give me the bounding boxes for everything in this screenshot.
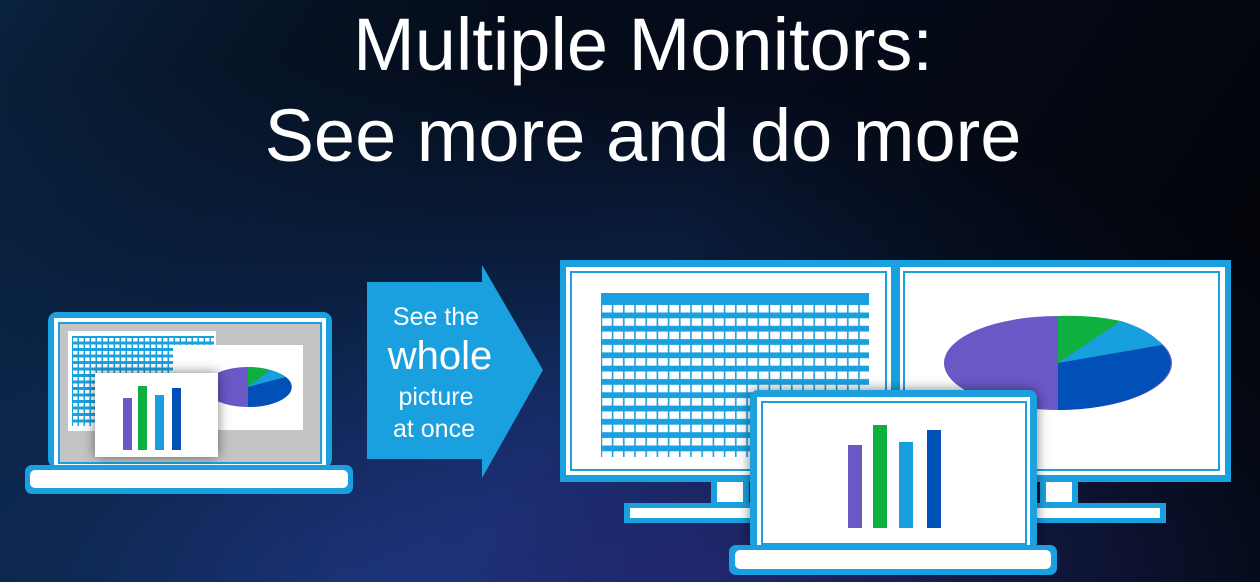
dual monitors — [560, 260, 1231, 523]
laptop base — [729, 545, 1057, 575]
arrow: see the whole picture at once: whole — [387, 334, 492, 378]
right monitor screen — [900, 267, 1225, 475]
arrow: see the whole picture at once: picture — [398, 383, 474, 411]
left monitor screen — [566, 267, 891, 475]
spreadsheet — [601, 293, 869, 457]
title: See more and do more — [265, 94, 1021, 177]
spreadsheet window — [68, 331, 216, 431]
arrow: see the whole picture at once — [367, 265, 543, 478]
monitor stands — [624, 478, 1166, 523]
small laptop (left) — [25, 312, 353, 494]
pie window — [173, 345, 303, 430]
bar chart window — [95, 373, 218, 457]
title: Multiple Monitors: — [353, 3, 933, 86]
arrow: see the whole picture at once: at once — [393, 415, 475, 443]
title — [265, 3, 1021, 177]
pie chart — [944, 316, 1172, 410]
bar chart — [848, 425, 941, 528]
arrow: see the whole picture at once: See the — [393, 303, 479, 331]
laptop base — [25, 465, 353, 494]
front laptop — [729, 390, 1057, 575]
